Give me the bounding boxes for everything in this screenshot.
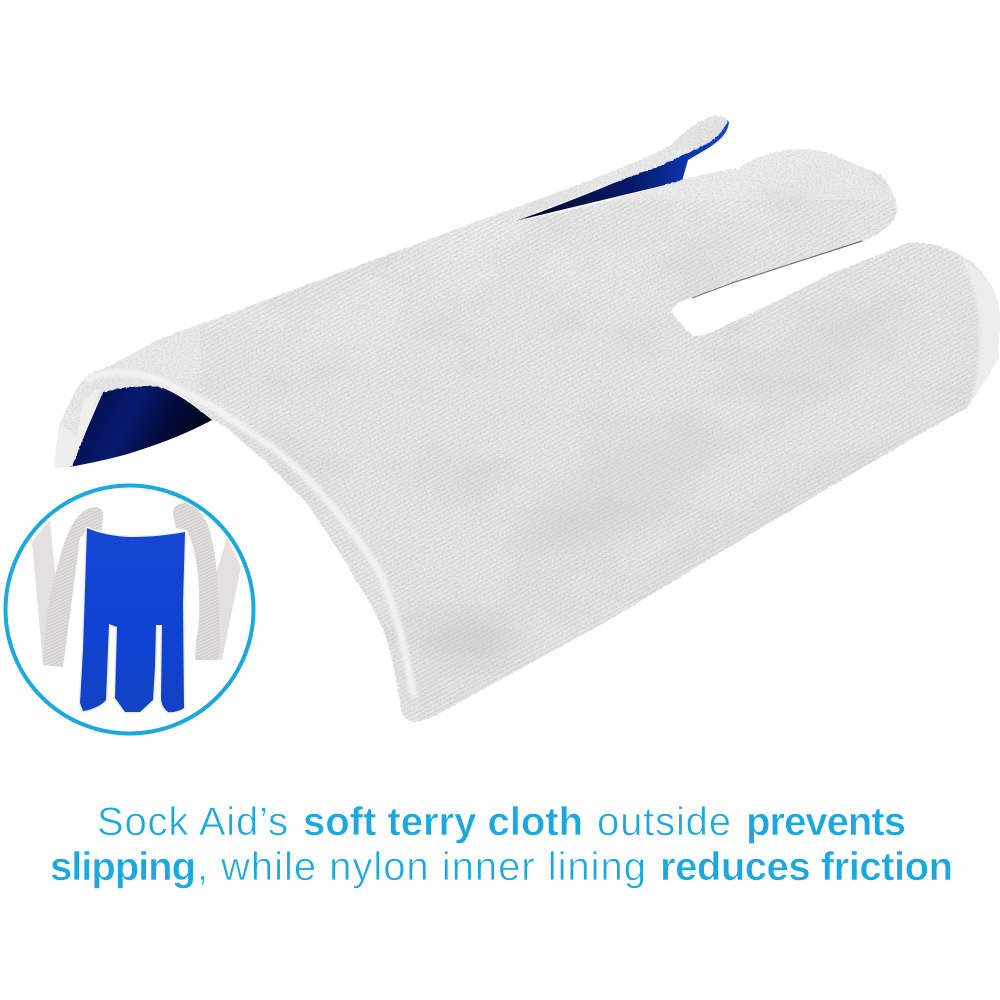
caption text: slipping — [50, 845, 196, 889]
caption text: , — [197, 845, 208, 889]
caption text: outside — [597, 800, 731, 844]
caption text: while nylon inner lining — [220, 845, 646, 889]
caption text: prevents — [746, 800, 906, 844]
knit weave texture and shading clipped to the cloth — [200, 200, 1000, 730]
left straps — [32, 507, 103, 667]
caption text: reduces friction — [660, 845, 953, 889]
blue inner lining seen through the top slit — [515, 120, 729, 221]
dark shadow line under the upper finger — [692, 241, 862, 298]
main terry cloth body — [55, 149, 1000, 722]
circle outline — [6, 486, 254, 734]
blue nylon sock aid panel — [80, 528, 185, 712]
caption text: soft terry cloth — [303, 800, 583, 844]
nylon weave texture — [80, 528, 185, 712]
inset circle: nylon inner lining — [6, 486, 254, 734]
caption text: Sock Aid’s — [97, 800, 288, 844]
product: terry cloth sock aid — [55, 116, 1000, 730]
white stitched hem along the curved edge — [86, 372, 414, 697]
right straps — [173, 503, 241, 660]
fold at the rounded end of the right finger — [961, 258, 1000, 402]
top strap flap — [480, 116, 727, 235]
dark inner lining at the left opening — [70, 384, 212, 467]
caption text — [50, 800, 953, 889]
white folded corner at the left opening — [55, 388, 100, 468]
